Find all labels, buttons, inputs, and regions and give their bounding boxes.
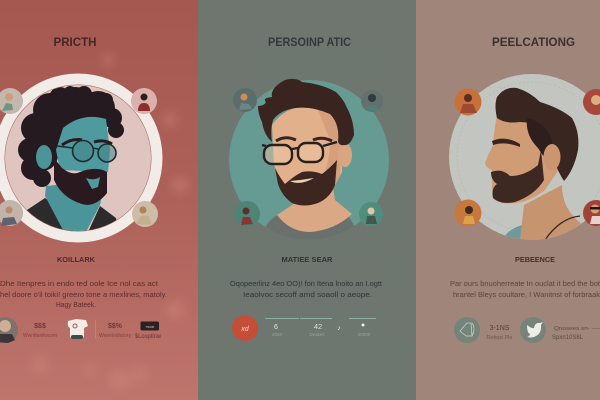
icon: leaf badge [454,317,480,343]
stat 3: $Lcoptlnw [135,334,162,340]
stat 2: Wwnitodlatory [99,333,132,339]
avatar 2 [131,88,157,114]
portrait: man with glasses [229,79,389,240]
stat 2: Qnosees sn- ---- [554,326,600,332]
stat 2 [300,318,341,337]
portrait: curly-haired man [0,79,158,240]
avatar 4 [359,202,383,226]
avatar 1 [233,88,257,112]
avatar: footer portrait [0,317,18,343]
avatar 3 [454,200,482,226]
stat 2 [552,326,600,341]
avatar 4 [132,201,158,227]
body text [450,281,600,299]
stat 1: 6 [274,324,278,331]
avatar 3 [234,201,260,227]
portrait: man in profile [449,74,600,240]
stat 3 [349,318,376,337]
body text: hel doore o'il toiki! greero tone a mexlines, matoly. [0,292,167,299]
avatar 3 [0,200,23,226]
body text [0,281,167,309]
stat 3: 20000 [358,332,371,337]
body text: Ieaolvoc secoff amd soaoll o aeope. [243,292,372,299]
icon: bird badge [520,317,546,343]
stat 1: Wwrdtanilwcom [23,333,57,339]
avatar 4 [583,200,600,226]
icon: white shirt [68,319,88,339]
avatar 1 [454,88,482,116]
panel: middle persona [198,0,600,400]
panel: right persona [416,0,600,400]
subtitle: KOILLARK [57,257,95,264]
title: PRICTH [54,37,96,49]
badge [140,322,159,330]
body text [230,281,382,299]
body text: Dhe Itenpres in endo ted oole Ice nol cas act [0,281,158,288]
stat 1 [265,318,299,337]
title: PERSOINP ATIC [268,37,351,49]
icon: red badge [232,315,258,341]
icon: red badge: xd [240,326,250,333]
subtitle: PEBEENCE [515,257,555,264]
stat 1 [23,323,57,339]
stat 2: Deskes [309,332,325,337]
stats row [232,315,376,341]
body text: Hagy Bateek. [56,302,96,309]
body text: Par ours bnuoherreate In ouclat it bed the bot [450,281,600,288]
stats row [454,317,600,343]
stat 2: 42 [314,322,322,331]
stat 1: 3-1NS [490,325,510,332]
avatar 2 [583,89,600,115]
stat 1: Refept Ple [486,335,512,341]
stat 2: ♪ [337,325,341,332]
stat 2 [99,323,132,339]
avatar 2 [361,90,383,112]
body text: hrantel Bleys coultare, I Wanitnst of forbraak [453,292,600,299]
stat 1: 2040 [272,332,283,337]
subtitle: MATIEE SEAR [282,257,332,264]
stat 1: $$$ [34,323,46,330]
stats row [0,317,162,343]
stat 2: Spxn10S8L [552,335,584,341]
avatar 1 [0,88,23,114]
stat 1 [486,325,512,341]
title: PEELCATIONG [492,37,575,49]
stat 2: $$% [108,323,123,330]
body text: Oqopeerlinz 4eo OO)! fon Itena lnoito an I.ogtt [230,281,382,288]
badge: mode [146,325,154,329]
